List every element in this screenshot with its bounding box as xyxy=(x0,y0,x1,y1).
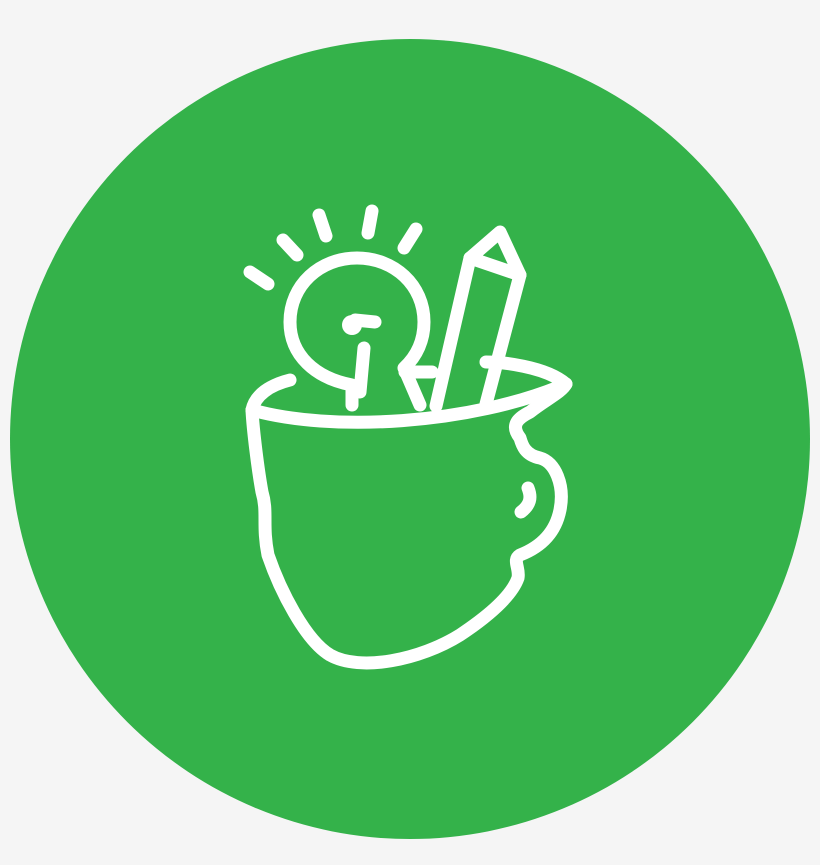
light bulb xyxy=(290,258,432,405)
head line art xyxy=(250,211,566,663)
head outline xyxy=(252,362,566,663)
pencil xyxy=(436,232,520,406)
light rays xyxy=(250,211,416,284)
